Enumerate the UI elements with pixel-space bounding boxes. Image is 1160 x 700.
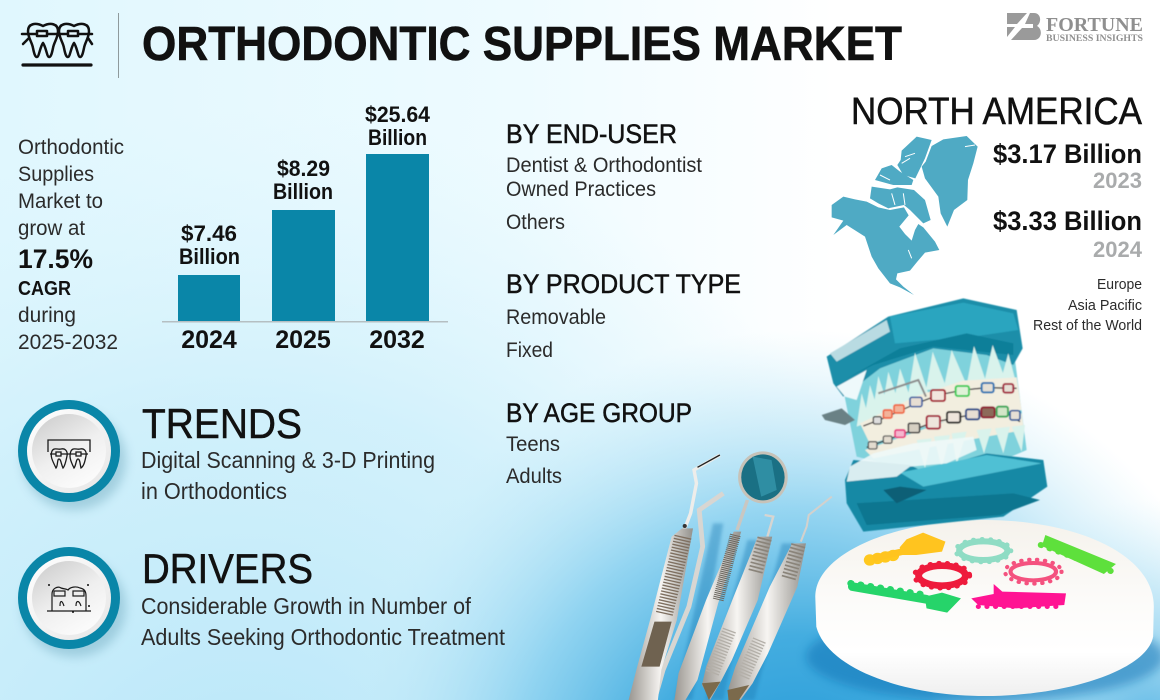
bar chart: 2025 xyxy=(275,326,331,354)
upper wire and brackets xyxy=(863,380,1017,426)
other regions: Asia Pacific xyxy=(1068,297,1142,314)
green ligature xyxy=(851,583,961,613)
upper jaw xyxy=(827,298,1023,400)
CAGR text block: during xyxy=(18,304,76,327)
photo: white disc with elastic ligatures xyxy=(806,520,1160,700)
panel: by age group: BY AGE GROUP xyxy=(506,398,692,428)
panel: by product type: Removable xyxy=(506,306,606,329)
panel: by age group xyxy=(506,398,692,488)
header divider xyxy=(118,13,119,78)
panel: by product type: BY PRODUCT TYPE xyxy=(506,269,741,299)
magenta ligature xyxy=(971,584,1066,608)
regional values: $3.33 Billion xyxy=(993,206,1142,236)
dental scaler xyxy=(727,497,832,700)
mouth interior xyxy=(843,347,1027,470)
lower teeth xyxy=(865,413,1025,468)
panel: trends xyxy=(18,400,435,510)
trends heading: TRENDS xyxy=(142,400,302,447)
CAGR text block: 17.5% xyxy=(18,244,93,274)
drivers text: Adults Seeking Orthodontic Treatment xyxy=(141,624,506,650)
bar chart xyxy=(162,102,448,354)
lower wire and brackets xyxy=(867,407,1020,449)
disc xyxy=(815,520,1154,696)
teal ring xyxy=(956,539,1011,562)
panel: by age group: Adults xyxy=(506,465,562,488)
photo: dental instruments xyxy=(629,451,832,700)
logo: Fortune Business Insights: FORTUNE xyxy=(1046,14,1143,36)
CAGR text block xyxy=(18,136,124,354)
panel: by age group: Teens xyxy=(506,433,560,456)
logo: Fortune Business Insights xyxy=(1007,13,1143,44)
tweezers xyxy=(629,455,723,700)
bar chart: Billion xyxy=(368,125,427,150)
CAGR text block: CAGR xyxy=(18,278,71,300)
dental mirror xyxy=(674,451,788,700)
panel: by end-user: BY END-USER xyxy=(506,119,677,149)
bar chart: $8.29 xyxy=(277,156,330,181)
title: ORTHODONTIC SUPPLIES MARKET xyxy=(142,18,902,71)
red ring xyxy=(914,563,970,588)
bar chart: 2032 xyxy=(369,326,425,354)
trends text xyxy=(141,447,435,504)
photo: dental model with braces xyxy=(822,298,1047,532)
drivers text: Considerable Growth in Number of xyxy=(141,593,472,619)
regional values xyxy=(993,139,1143,262)
other regions: Rest of the World xyxy=(1033,317,1142,334)
panel: by end-user: Others xyxy=(506,211,565,234)
other regions xyxy=(1033,276,1142,334)
map: North America xyxy=(832,136,978,295)
drivers text xyxy=(141,593,506,650)
trends text: in Orthodontics xyxy=(141,478,287,504)
CAGR text block: 2025-2032 xyxy=(18,331,118,354)
icon: braces on teeth xyxy=(22,24,92,65)
CAGR text block: Market to xyxy=(18,190,103,213)
pink ring xyxy=(1005,560,1062,584)
bar chart: Billion xyxy=(273,179,333,204)
yellow ligature xyxy=(870,533,945,560)
panel: by end-user xyxy=(506,119,702,234)
CAGR text block: grow at xyxy=(18,217,85,240)
panel: drivers xyxy=(18,545,506,657)
regional values: $3.17 Billion xyxy=(993,139,1142,169)
bar chart: 2024 xyxy=(181,326,237,354)
regional values: 2023 xyxy=(1093,168,1142,193)
panel: by product type: Fixed xyxy=(506,339,553,362)
post xyxy=(822,408,855,425)
regional values: 2024 xyxy=(1093,237,1143,262)
icon: drivers badge xyxy=(18,547,126,657)
panel: by end-user: Dentist & Orthodontist xyxy=(506,154,702,177)
other regions: Europe xyxy=(1097,276,1142,293)
trends text: Digital Scanning & 3-D Printing xyxy=(141,447,435,473)
lower jaw xyxy=(845,453,1047,532)
logo: Fortune Business Insights: BUSINESS INSIGHTS xyxy=(1046,34,1143,44)
bar chart: $7.46 xyxy=(181,221,237,246)
lime ligature xyxy=(1041,535,1116,574)
bar chart: $25.64 xyxy=(365,102,431,127)
panel: by end-user: Owned Practices xyxy=(506,178,656,201)
upper teeth xyxy=(857,345,1022,444)
region heading: NORTH AMERICA xyxy=(851,91,1143,133)
CAGR text block: Supplies xyxy=(18,163,94,186)
bar chart: Billion xyxy=(179,244,240,269)
panel: by product type xyxy=(506,269,741,362)
dental probe xyxy=(702,515,773,700)
CAGR text block: Orthodontic xyxy=(18,136,124,159)
clear retainer xyxy=(847,437,977,482)
icon: trends badge xyxy=(18,400,126,510)
drivers heading: DRIVERS xyxy=(142,545,313,592)
